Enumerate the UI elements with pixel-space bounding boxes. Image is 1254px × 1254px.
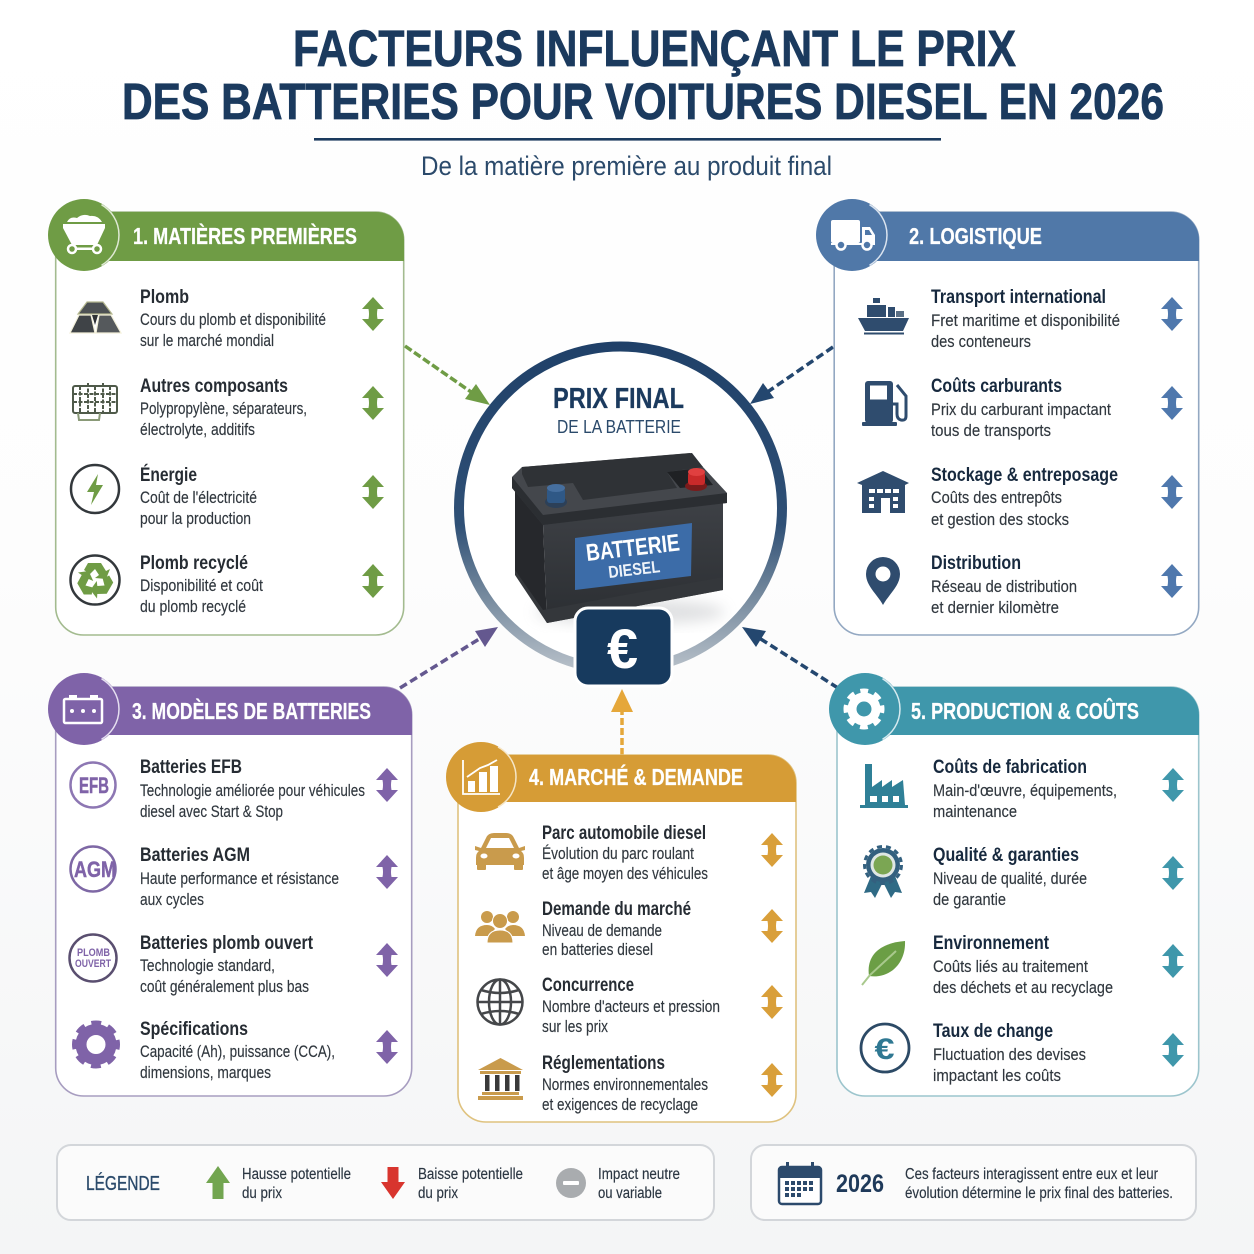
text: Batteries EFB — [140, 756, 365, 821]
icon: lead ingots — [70, 302, 121, 333]
text: Environnement: Coûts liés au traitement — [933, 958, 1088, 976]
text: Stockage & entreposage: Coûts des entrepôts — [931, 489, 1062, 507]
text: Distribution: et dernier kilomètre — [931, 599, 1059, 617]
arrow: variable — [761, 833, 783, 867]
text: Énergie: pour la production — [140, 510, 251, 528]
text: Autres composants — [140, 375, 307, 439]
row: Autres composants — [73, 375, 384, 439]
icon: AGM badge: AGM — [74, 857, 116, 882]
legend: baisse: Baisse potentielle — [418, 1166, 523, 1183]
battery label — [575, 523, 692, 590]
icon: euro coin: € — [874, 1033, 895, 1066]
panel: légende — [57, 1145, 714, 1220]
icon: recycling — [70, 556, 120, 604]
icon: EFB badge: EFB — [79, 773, 109, 798]
icon: globe — [478, 980, 522, 1024]
text: Coûts de fabrication: Main-d'œuvre, équipements, — [933, 782, 1117, 800]
text: Qualité & garanties: Qualité & garanties — [933, 844, 1079, 866]
row: Coûts de fabrication — [860, 756, 1184, 821]
panel: 5 production et coûts — [829, 673, 1199, 1096]
row: Plomb — [70, 286, 384, 350]
icon: warehouse — [857, 471, 909, 513]
text: Environnement: des déchets et au recyclage — [933, 979, 1113, 997]
icon: factory — [860, 764, 908, 808]
icon: lightning — [71, 465, 119, 513]
text: Stockage & entreposage: et gestion des stocks — [931, 511, 1069, 529]
legend: hausse: du prix — [242, 1185, 282, 1202]
icon: fuel pump — [862, 381, 906, 426]
battery label: BATTERIE — [585, 529, 681, 567]
arrow: variable — [1162, 768, 1184, 802]
icon: white gear — [846, 692, 882, 726]
text: Batteries AGM: aux cycles — [140, 891, 204, 909]
text: Coûts carburants: tous de transports — [931, 422, 1051, 440]
arrow: marché to price — [611, 689, 633, 755]
icon: rising bar chart — [463, 760, 500, 794]
text: Batteries AGM: Batteries AGM — [140, 844, 250, 866]
text: Coûts de fabrication: maintenance — [933, 803, 1017, 821]
text: Parc automobile diesel: Parc automobile diesel — [542, 822, 706, 844]
text: Autres composants: Autres composants — [140, 375, 288, 397]
text: Énergie: Énergie — [140, 463, 197, 486]
text: Autres composants: Polypropylène, séparateurs, — [140, 400, 307, 418]
text: Batteries AGM: Haute performance et résistance — [140, 870, 339, 888]
icon: leaf — [862, 941, 905, 985]
arrow: production to price — [742, 627, 838, 688]
icon: people — [475, 911, 525, 943]
text: Taux de change: impactant les coûts — [933, 1067, 1061, 1085]
text: Énergie — [140, 463, 257, 528]
legend: hausse: Hausse potentielle — [242, 1166, 351, 1183]
arrow: variable — [376, 768, 398, 802]
arrow: variable — [1161, 386, 1183, 420]
row: Distribution — [866, 552, 1183, 617]
title — [122, 20, 1164, 130]
icon: euro coin — [861, 1024, 909, 1072]
text: Plomb: Plomb — [140, 286, 189, 308]
row: Batteries plomb ouvert — [70, 932, 398, 996]
row: Qualité & garanties — [864, 844, 1184, 909]
row: Demande du marché — [475, 898, 783, 959]
subtitle: De la matière première au produit final — [421, 151, 832, 181]
heading: prix final — [553, 383, 684, 437]
arrow: variable — [376, 1030, 398, 1064]
arrow: variable — [761, 1063, 783, 1097]
arrow: variable — [1162, 1033, 1184, 1067]
text: Plomb recyclé: du plomb recyclé — [140, 598, 246, 616]
icon: calendar — [779, 1162, 821, 1204]
year: 2026 — [836, 1170, 884, 1198]
icon: plomb ouvert badge: OUVERT — [75, 958, 111, 970]
row: Batteries AGM — [70, 844, 398, 909]
arrow: modèles to price — [400, 627, 498, 688]
arrow: variable — [362, 297, 384, 331]
panel: note 2026 — [751, 1145, 1196, 1220]
icon: gear — [75, 1024, 117, 1066]
arrow: variable — [761, 909, 783, 943]
arrow: variable — [376, 855, 398, 889]
text: Concurrence: Nombre d'acteurs et pression — [542, 998, 720, 1016]
row: Environnement — [862, 932, 1184, 997]
icon: mine cart — [63, 215, 105, 253]
icon: map pin — [866, 557, 900, 605]
text: Plomb recyclé: Disponibilité et coût — [140, 577, 263, 595]
text: Qualité & garanties — [933, 844, 1087, 909]
panel header — [816, 199, 1199, 271]
arrow: logistique to price — [750, 347, 833, 404]
text: Environnement: Environnement — [933, 932, 1049, 954]
heading: prix final: PRIX FINAL — [553, 383, 684, 415]
text: Stockage & entreposage — [931, 464, 1118, 529]
text: Batteries EFB: Batteries EFB — [140, 756, 242, 778]
panel header: 3. MODÈLES DE BATTERIES — [132, 697, 371, 724]
text: Distribution: Distribution — [931, 552, 1021, 574]
row: Parc automobile diesel — [475, 822, 783, 883]
text: Coûts carburants — [931, 375, 1111, 440]
arrow: variable — [362, 386, 384, 420]
legend heading: LÉGENDE — [86, 1172, 160, 1195]
text: Batteries plomb ouvert: coût généralement plus bas — [140, 978, 309, 996]
text: Taux de change: Taux de change — [933, 1020, 1053, 1042]
arrow: variable — [1161, 475, 1183, 509]
text: Parc automobile diesel: et âge moyen des véhicules — [542, 865, 708, 883]
heading: prix final: DE LA BATTERIE — [557, 416, 681, 437]
text: Plomb recyclé — [140, 552, 263, 616]
note text — [905, 1166, 1173, 1202]
text: Batteries AGM — [140, 844, 339, 909]
text: Demande du marché: Demande du marché — [542, 898, 691, 920]
text: Réglementations: et exigences de recyclage — [542, 1096, 698, 1114]
text: Plomb: Cours du plomb et disponibilité — [140, 311, 326, 329]
panel header: 4. MARCHÉ & DEMANDE — [529, 763, 743, 790]
text: Plomb: sur le marché mondial — [140, 332, 274, 350]
text: Réglementations: Normes environnementales — [542, 1076, 708, 1094]
text: Concurrence: Concurrence — [542, 974, 634, 996]
text: Transport international: des conteneurs — [931, 333, 1031, 351]
legend: baisse — [381, 1166, 523, 1202]
text: Distribution — [931, 552, 1077, 617]
text: Batteries plomb ouvert — [140, 932, 313, 996]
row: Réglementations — [478, 1052, 783, 1114]
text: Taux de change: Fluctuation des devises — [933, 1046, 1086, 1064]
text: Parc automobile diesel — [542, 822, 708, 883]
panel header: 1. MATIÈRES PREMIÈRES — [133, 222, 357, 249]
panel header — [829, 673, 1199, 745]
row: Transport international — [858, 286, 1183, 351]
arrow: variable — [362, 564, 384, 598]
row: Stockage & entreposage — [857, 464, 1183, 529]
legend: neutre: ou variable — [598, 1185, 662, 1202]
row: Batteries EFB — [70, 756, 398, 821]
text: Demande du marché: en batteries diesel — [542, 941, 653, 959]
arrow: variable — [362, 475, 384, 509]
text: Transport international: Fret maritime et disponibilité — [931, 312, 1120, 330]
text: Spécifications: dimensions, marques — [140, 1064, 271, 1082]
icon: truck — [831, 220, 875, 250]
icon: battery outline — [64, 695, 102, 723]
text: Demande du marché: Niveau de demande — [542, 922, 662, 940]
text: Énergie: Coût de l'électricité — [140, 489, 257, 507]
arrow: variable — [1162, 856, 1184, 890]
panel: 2 logistique — [816, 199, 1199, 635]
arrow: variable — [1161, 564, 1183, 598]
icon: rosette — [864, 846, 902, 898]
text: Taux de change — [933, 1020, 1086, 1085]
arrow: variable — [1161, 297, 1183, 331]
text: Concurrence — [542, 974, 720, 1036]
icon: institution — [478, 1058, 523, 1100]
text: Coûts de fabrication: Coûts de fabrication — [933, 756, 1087, 778]
text: Spécifications — [140, 1018, 335, 1082]
text: Transport international: Transport international — [931, 286, 1106, 308]
euro badge — [575, 608, 672, 686]
text: Spécifications: Spécifications — [140, 1018, 248, 1040]
note text: Ces facteurs interagissent entre eux et leur — [905, 1166, 1158, 1183]
panel: 4 marché et demande — [446, 742, 796, 1122]
panel header — [48, 199, 404, 271]
panel header — [48, 673, 412, 745]
text: Concurrence: sur les prix — [542, 1018, 609, 1036]
text: Réglementations — [542, 1052, 708, 1114]
text: Parc automobile diesel: Évolution du parc roulant — [542, 844, 694, 863]
arrow: variable — [761, 985, 783, 1019]
battery label: DIESEL — [607, 557, 661, 582]
icon: EFB badge — [70, 762, 116, 808]
text: Batteries EFB: diesel avec Start & Stop — [140, 803, 283, 821]
text: Réglementations: Réglementations — [542, 1052, 665, 1074]
arrow: variable — [1162, 944, 1184, 978]
row: Coûts carburants — [862, 375, 1183, 440]
icon: AGM badge — [70, 846, 116, 892]
text: Stockage & entreposage: Stockage & entreposage — [931, 464, 1118, 486]
euro badge: € — [607, 617, 638, 680]
panel: 1 matières premières — [48, 199, 404, 635]
text: Coûts de fabrication — [933, 756, 1117, 821]
panel: 3 modèles de batteries — [48, 673, 412, 1096]
icon: car — [475, 833, 525, 870]
text: Distribution: Réseau de distribution — [931, 578, 1077, 596]
text: Coûts carburants: Coûts carburants — [931, 375, 1062, 397]
text: Transport international — [931, 286, 1120, 351]
row: Plomb recyclé — [70, 552, 384, 616]
panel header — [446, 742, 796, 812]
text: Qualité & garanties: Niveau de qualité, durée — [933, 870, 1087, 888]
battery illustration — [512, 453, 727, 625]
title: FACTEURS INFLUENÇANT LE PRIX — [293, 20, 1016, 77]
text: Autres composants: électrolyte, additifs — [140, 421, 255, 439]
row: Énergie — [71, 463, 384, 528]
central graphic: final price ring — [459, 346, 782, 686]
legend: neutre — [556, 1166, 680, 1202]
legend: neutre: Impact neutre — [598, 1166, 680, 1183]
icon: plomb ouvert badge: PLOMB — [77, 947, 110, 959]
text: Batteries EFB: Technologie améliorée pour véhicules — [140, 782, 365, 800]
text: Batteries plomb ouvert: Technologie standard, — [140, 957, 275, 975]
panel header: 2. LOGISTIQUE — [909, 223, 1042, 249]
text: Plomb recyclé: Plomb recyclé — [140, 552, 248, 574]
note text: évolution détermine le prix final des batteries. — [905, 1185, 1173, 1202]
text: Coûts carburants: Prix du carburant impactant — [931, 401, 1111, 419]
text: Batteries plomb ouvert: Batteries plomb ouvert — [140, 932, 313, 954]
row: Taux de change — [861, 1020, 1184, 1085]
legend: hausse — [206, 1166, 351, 1202]
legend: baisse: du prix — [418, 1185, 458, 1202]
row: Concurrence — [478, 974, 783, 1036]
row: Spécifications — [75, 1018, 398, 1082]
icon: components grid — [73, 383, 117, 420]
icon: cargo ship — [858, 298, 909, 334]
text: Spécifications: Capacité (Ah), puissance (CCA), — [140, 1043, 335, 1061]
text: Demande du marché — [542, 898, 691, 959]
text: Environnement — [933, 932, 1113, 997]
panel header: 5. PRODUCTION & COÛTS — [911, 697, 1139, 724]
arrow: variable — [376, 943, 398, 977]
arrow: matières premières to price — [405, 346, 490, 405]
text: Plomb — [140, 286, 326, 350]
icon: plomb ouvert badge — [70, 934, 116, 982]
text: Qualité & garanties: de garantie — [933, 891, 1006, 909]
